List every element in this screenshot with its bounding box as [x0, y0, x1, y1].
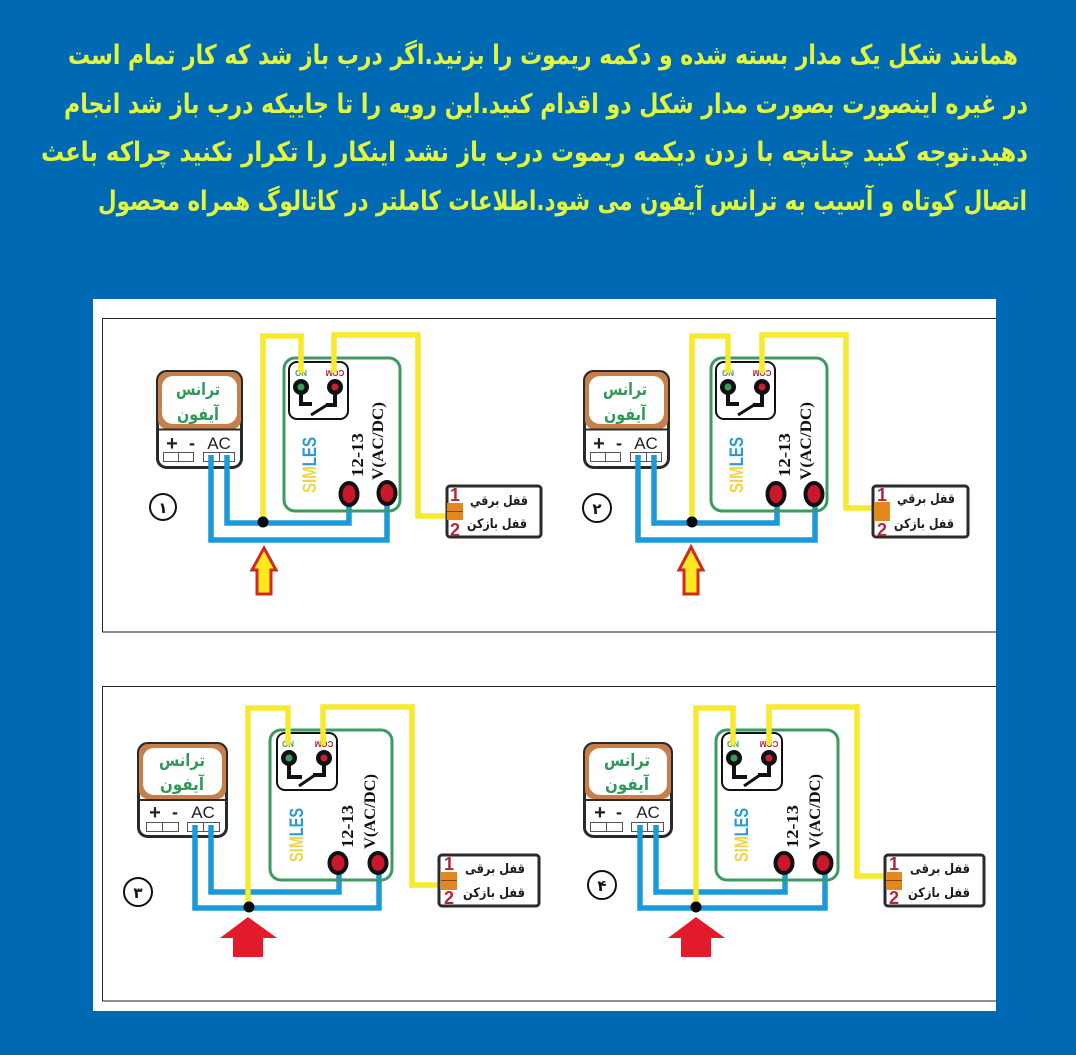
controller module 4: 12-13	[783, 805, 802, 848]
step number 2: ۲	[592, 500, 602, 518]
controller module 2: COM	[752, 368, 771, 377]
arrow: red 4	[668, 917, 725, 957]
transformer 1: آیفون	[177, 403, 220, 425]
transformer 3: آیفون	[160, 773, 205, 795]
controller module 2: V(AC/DC)	[798, 402, 815, 480]
transformer 3: +	[149, 802, 161, 824]
electric lock 1: قفل برقي	[470, 494, 528, 509]
electric lock 3	[439, 854, 539, 908]
electric lock 3: قفل برقی	[465, 862, 525, 877]
transformer 1: ترانس	[176, 380, 220, 400]
electric lock 2: قفل برقي	[897, 492, 955, 507]
electric lock 1: قفل بازکن	[467, 517, 527, 532]
electric lock 4: 1	[889, 854, 899, 874]
controller module 3: V(AC/DC)	[362, 774, 379, 849]
electric lock 3: 2	[444, 888, 454, 908]
electric lock 4	[885, 854, 984, 908]
controller module 4: V(AC/DC)	[807, 774, 824, 849]
controller module 3: 12-13	[338, 805, 357, 848]
transformer 1: AC	[207, 434, 231, 453]
transformer 4: +	[594, 802, 606, 824]
step number 3: ۳	[133, 884, 143, 902]
electric lock 1: 1	[450, 485, 460, 505]
junction dot 4	[690, 902, 702, 912]
controller module 1	[284, 358, 400, 511]
transformer 4: AC	[636, 803, 660, 822]
transformer 4: ترانس	[604, 751, 650, 771]
diagram 4	[584, 707, 984, 957]
blue wires 1	[211, 455, 387, 540]
controller module 2	[711, 358, 827, 511]
blue wires 4	[640, 825, 825, 908]
electric lock 2	[873, 485, 968, 540]
controller module 1: NO	[295, 368, 307, 377]
controller module 1: 12-13	[348, 433, 367, 477]
controller module 1: COM	[325, 368, 344, 377]
electric lock 1: 2	[450, 520, 460, 540]
transformer 2: +	[593, 433, 605, 455]
junction dot 1	[258, 516, 268, 528]
transformer 3: ترانس	[159, 751, 205, 771]
transformer 2: AC	[634, 434, 658, 453]
blue wires 2	[638, 455, 815, 540]
transformer 3	[138, 744, 226, 836]
yellow wires 2	[692, 335, 874, 522]
transformer 4: -	[616, 802, 622, 822]
controller module 1: V(AC/DC)	[370, 402, 387, 480]
transformer 2: آیفون	[604, 403, 647, 425]
diagram 3	[124, 707, 539, 957]
transformer 1: -	[189, 433, 195, 453]
transformer 1	[158, 372, 242, 468]
controller module 3: COM	[314, 739, 333, 748]
controller module 4	[716, 730, 838, 880]
arrow: yellow 1	[252, 548, 276, 594]
instruction text block	[41, 39, 1028, 217]
electric lock 4: قفل برقی	[910, 862, 970, 877]
transformer 2	[584, 372, 668, 468]
arrow: yellow 2	[679, 547, 703, 594]
step number 4: ۴	[597, 877, 607, 895]
diagram 1	[150, 335, 541, 594]
yellow wires 3	[248, 707, 442, 907]
controller module 3	[270, 730, 392, 880]
transformer 4: آیفون	[605, 773, 650, 795]
controller module 3: SIMLES	[287, 808, 308, 862]
transformer 2: -	[616, 433, 622, 453]
controller module 3: NO	[282, 739, 294, 748]
controller module 2: 12-13	[775, 433, 794, 477]
controller module 4: COM	[759, 739, 778, 748]
transformer 4	[584, 744, 672, 836]
step number 1	[150, 494, 176, 520]
junction dot 2	[686, 516, 698, 528]
transformer 3: -	[172, 802, 178, 822]
white diagram panel	[93, 299, 996, 1011]
controller module 4: SIMLES	[732, 808, 753, 862]
step number 1: ۱	[158, 499, 168, 517]
electric lock 2: قفل بازکن	[894, 517, 954, 532]
step number 2	[583, 494, 611, 522]
electric lock 2: 1	[877, 485, 887, 505]
junction dot 3	[244, 902, 254, 912]
controller module 2: SIMLES	[727, 437, 748, 493]
transformer 1: +	[166, 433, 178, 455]
electric lock 4: 2	[889, 888, 899, 908]
blue wires 3	[195, 825, 379, 908]
arrow: red 3	[220, 917, 277, 957]
yellow wires 1	[263, 335, 447, 522]
diagram 2	[583, 335, 968, 594]
step number 3	[124, 878, 152, 906]
step number 4	[588, 871, 616, 899]
transformer 3: AC	[191, 803, 215, 822]
electric lock 4: قفل بازکن	[908, 886, 970, 901]
controller module 2: NO	[722, 368, 734, 377]
controller module 1: SIMLES	[300, 437, 321, 493]
electric lock 2: 2	[877, 520, 887, 540]
electric lock 1	[447, 485, 541, 540]
yellow wires 4	[696, 707, 886, 907]
transformer 2: ترانس	[603, 380, 647, 400]
electric lock 3: 1	[444, 854, 454, 874]
controller module 4: NO	[727, 739, 739, 748]
electric lock 3: قفل بازکن	[463, 886, 525, 901]
